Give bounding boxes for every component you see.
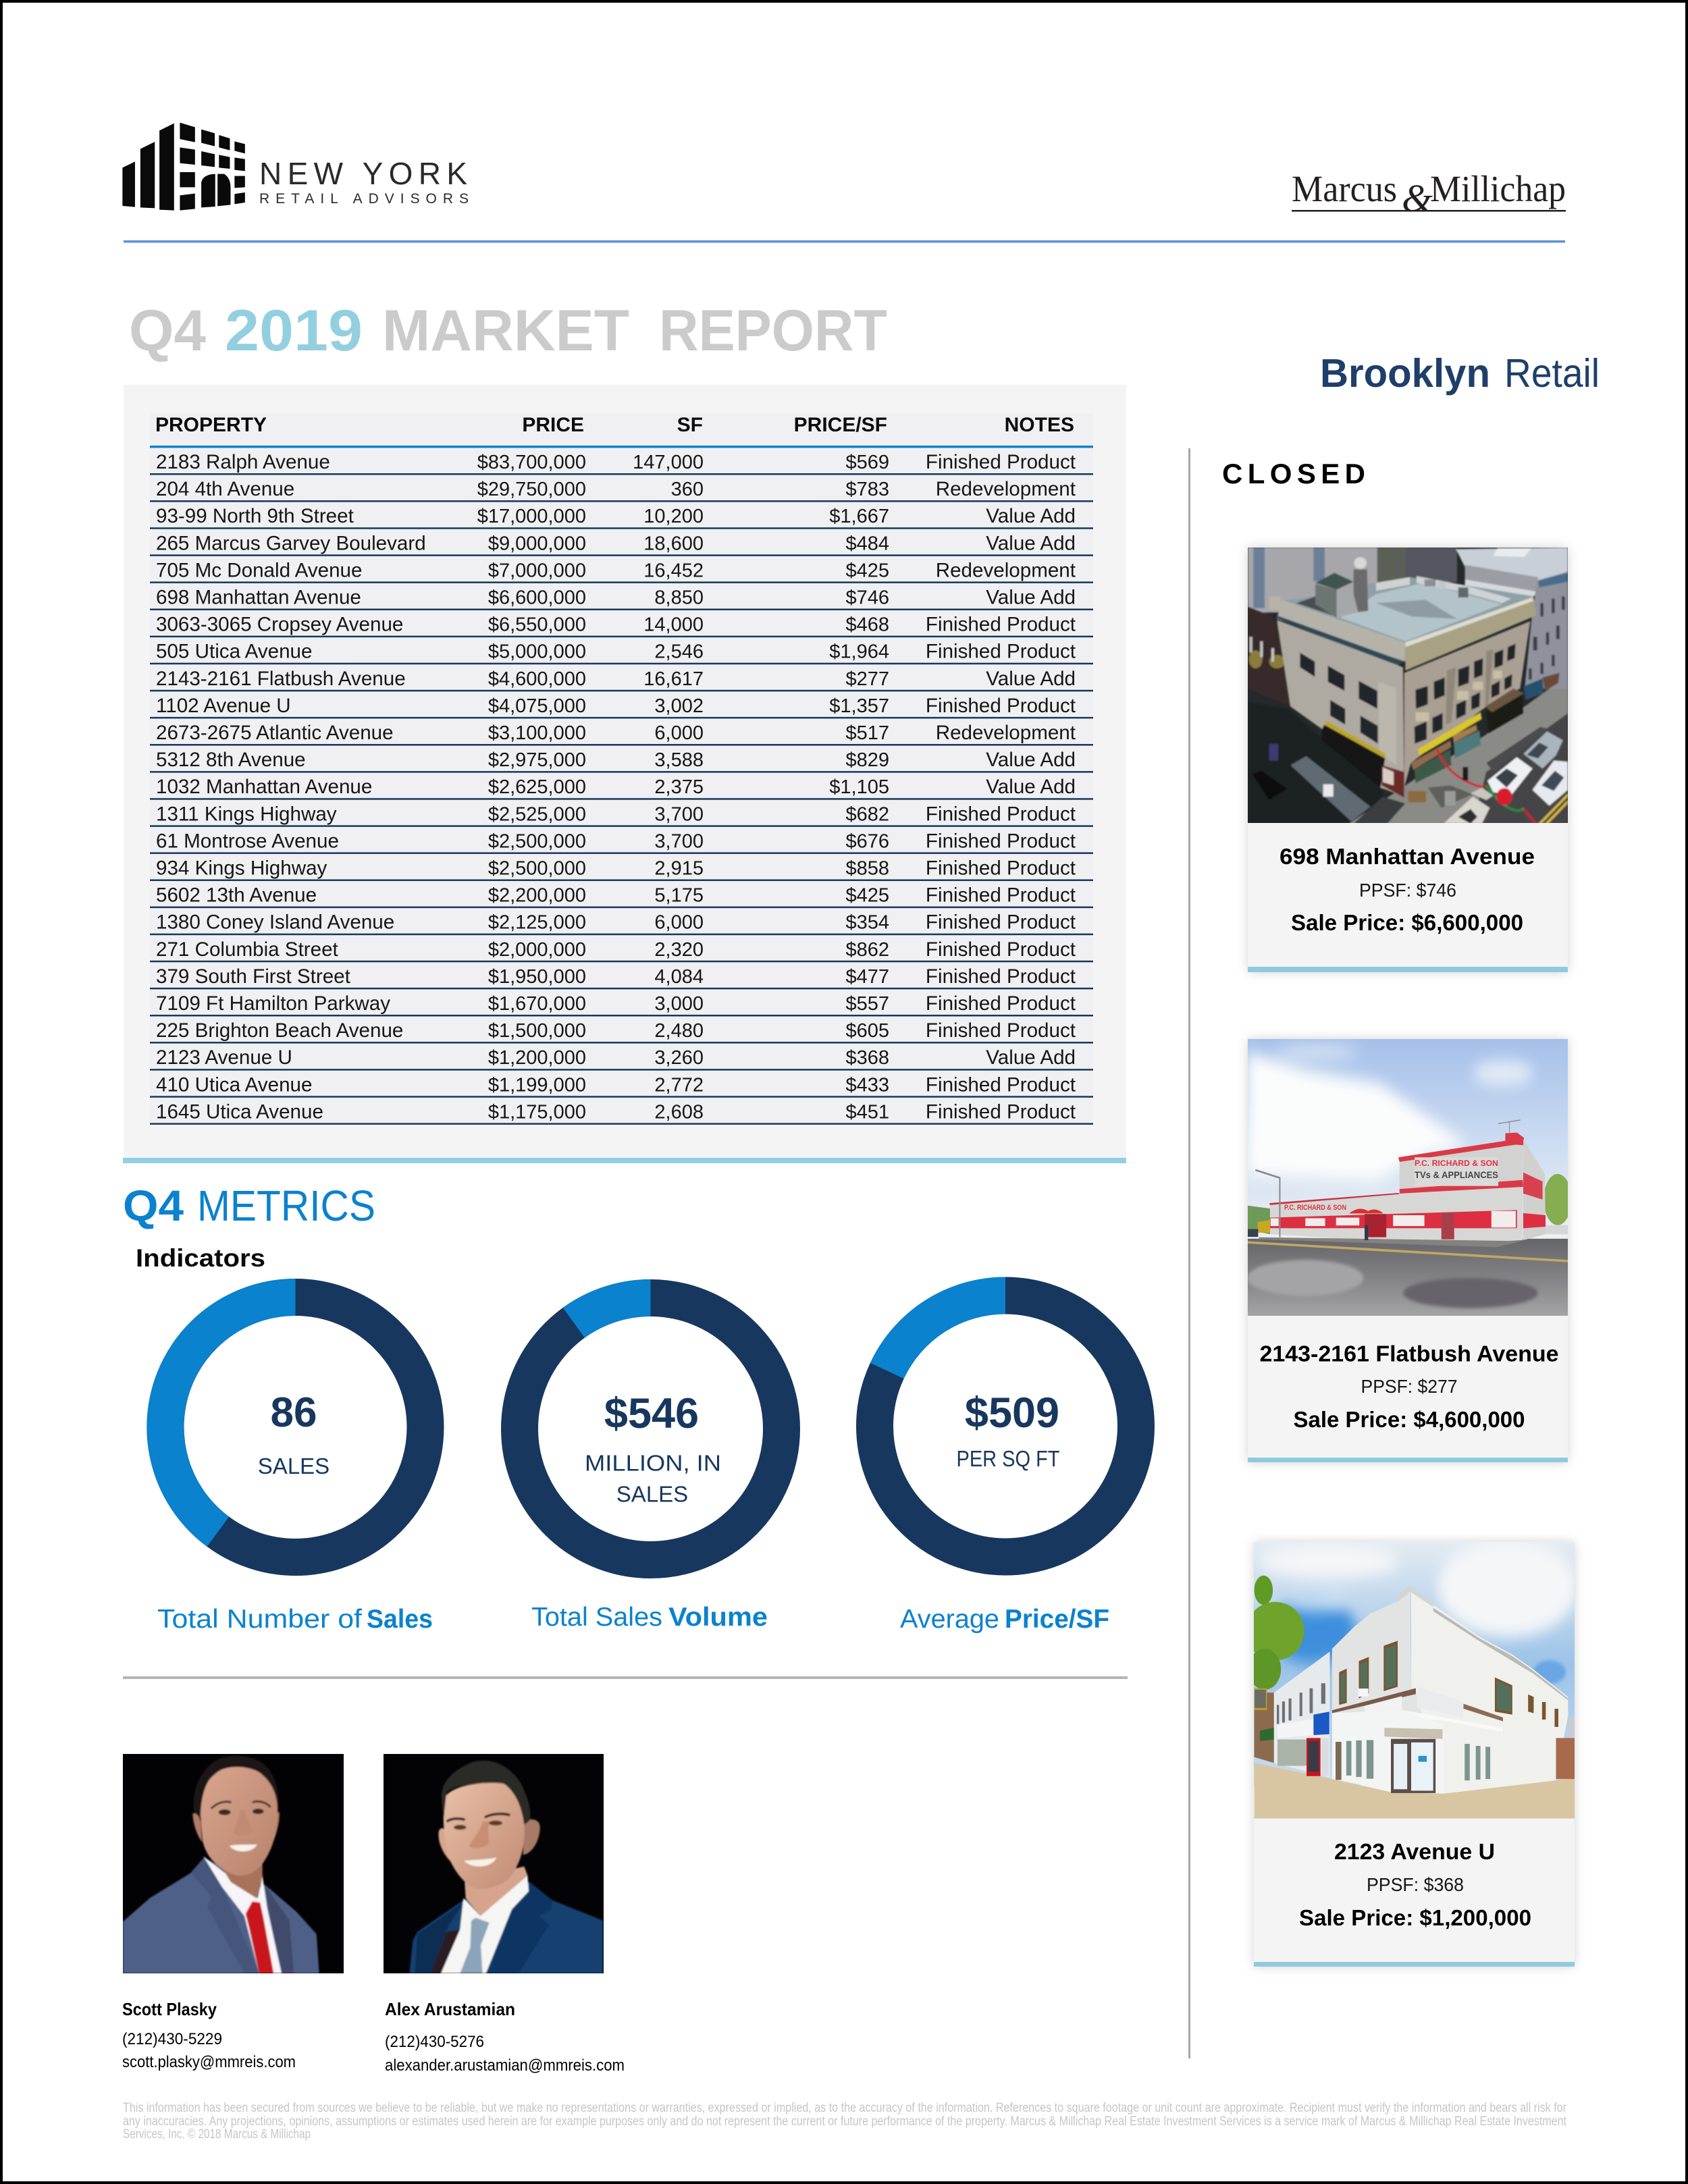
text: card details	[1260, 1341, 1558, 1432]
table rows: 1032 Manhattan Avenue	[156, 776, 372, 798]
table header: PRICE/SF	[794, 414, 887, 436]
heading: Q4 Metrics	[123, 1181, 375, 1230]
contact: Scott Plasky: (212)430-5229	[122, 2030, 222, 2048]
table rows: Finished Product	[926, 641, 1076, 663]
table rows: 3,000	[654, 993, 704, 1015]
contact: Alex Arustamian	[385, 1999, 625, 2075]
donut chart: total number of sales	[147, 1279, 425, 1557]
table rows: $83,700,000	[477, 452, 586, 473]
logo: Marcus & Millichap	[1292, 168, 1566, 220]
table rows: $1,950,000	[488, 966, 586, 988]
table rows: $4,600,000	[488, 668, 586, 690]
table rows: 147,000	[633, 452, 704, 473]
table rows: 3063-3065 Cropsey Avenue	[156, 614, 403, 636]
table rows: $17,000,000	[477, 506, 586, 527]
table rows: $29,750,000	[477, 479, 586, 500]
table rows: Finished Product	[926, 1100, 1076, 1123]
table rows: $2,625,000	[488, 776, 586, 798]
title: REPORT	[659, 298, 887, 363]
table rows: $2,000,000	[488, 939, 586, 961]
table rows: Redevelopment	[936, 722, 1076, 744]
table rows: 3,700	[654, 803, 704, 825]
table rows: $829	[845, 749, 889, 771]
table rows: $425	[845, 885, 889, 907]
table rows: $1,500,000	[488, 1020, 586, 1042]
table rows: Value Add	[986, 668, 1076, 690]
table rows: 225 Brighton Beach Avenue	[156, 1019, 403, 1042]
table rows: 2123 Avenue U	[156, 1046, 292, 1069]
heading: Q4 Metrics: METRICS	[197, 1181, 375, 1230]
table rows: 2,480	[654, 1020, 704, 1042]
table rows: 271 Columbia Street	[156, 938, 338, 961]
table rows: $9,000,000	[488, 533, 586, 554]
disclaimer: Services, Inc. © 2018 Marcus & Millichap	[123, 2127, 311, 2141]
table rows: Finished Product	[926, 857, 1076, 879]
table rows: Value Add	[986, 776, 1076, 798]
table header: PROPERTY	[155, 414, 267, 436]
table rows: Finished Product	[926, 965, 1076, 988]
heading: Closed: CLOSED	[1222, 458, 1365, 489]
table rows: $569	[845, 452, 889, 473]
table rows: $2,500,000	[488, 857, 586, 879]
donut chart: average price per SF: PER SQ FT	[956, 1446, 1060, 1471]
table rows: 14,000	[643, 614, 704, 636]
table rows: Finished Product	[926, 1073, 1076, 1096]
title: Q4	[129, 298, 206, 363]
table rows: 16,452	[643, 560, 704, 581]
photo: 2123 Avenue U building	[1246, 1537, 1577, 1819]
table rows: $4,075,000	[488, 695, 586, 717]
table rows: 2,772	[654, 1074, 704, 1096]
table rows: $7,000,000	[488, 560, 586, 581]
text: logo wordmark	[259, 156, 469, 207]
text: card details: Sale Price: $4,600,000	[1294, 1407, 1525, 1432]
table rows: 934 Kings Highway	[156, 857, 327, 879]
caption: total number of sales	[157, 1605, 433, 1634]
text: card details	[1299, 1839, 1531, 1930]
table rows	[150, 451, 1093, 1125]
table rows: $605	[845, 1020, 889, 1042]
heading: Brooklyn Retail: Brooklyn	[1320, 351, 1490, 396]
table rows: 2143-2161 Flatbush Avenue	[156, 668, 406, 690]
table rows: Finished Product	[926, 614, 1076, 636]
donut chart: total sales volume: $546	[604, 1390, 699, 1437]
caption: total number of sales: Total Number of	[157, 1605, 362, 1634]
disclaimer	[123, 2101, 1567, 2141]
table rows: $1,670,000	[488, 993, 586, 1015]
table rows: $746	[845, 587, 889, 609]
table rows: $682	[845, 803, 889, 825]
table rows: $477	[845, 966, 889, 988]
table rows: 2,915	[654, 857, 704, 879]
table rows: Value Add	[986, 1046, 1076, 1069]
card: 698 Manhattan Avenue	[1248, 548, 1568, 972]
table rows: $862	[845, 939, 889, 961]
table rows: 8,850	[654, 587, 704, 609]
table rows: $1,200,000	[488, 1047, 586, 1069]
table rows: $5,000,000	[488, 641, 586, 663]
table rows: 2183 Ralph Avenue	[156, 451, 330, 473]
text: logo wordmark: NEW YORK	[259, 156, 467, 191]
text: card details	[1280, 844, 1535, 935]
table rows: 18,600	[643, 533, 704, 554]
table rows: $2,525,000	[488, 803, 586, 825]
table rows: 6,000	[654, 722, 704, 744]
photo: Scott Plasky portrait	[123, 1754, 344, 1973]
table rows: Value Add	[986, 586, 1076, 609]
title: 2019	[225, 298, 363, 363]
table rows: Redevelopment	[936, 478, 1076, 500]
table rows: 5312 8th Avenue	[156, 749, 306, 771]
table rows: 2,546	[654, 641, 704, 663]
table rows: $6,600,000	[488, 587, 586, 609]
table rows: $1,105	[829, 776, 889, 798]
table rows: $2,975,000	[488, 749, 586, 771]
contact: Scott Plasky: Scott Plasky	[122, 1999, 217, 2019]
table rows: 2,608	[654, 1101, 704, 1123]
table rows: 61 Montrose Avenue	[156, 830, 339, 852]
table rows: $858	[845, 857, 889, 879]
table rows: $2,500,000	[488, 830, 586, 852]
table rows: 1380 Coney Island Avenue	[156, 911, 394, 934]
table rows: $1,357	[829, 695, 889, 717]
contact: Alex Arustamian: (212)430-5276	[385, 2033, 484, 2051]
caption: total sales volume: Volume	[668, 1603, 768, 1632]
photo: 2143-2161 Flatbush Avenue building: P.C. RICHARD & SON	[1284, 1204, 1346, 1212]
table rows: 705 Mc Donald Avenue	[156, 559, 362, 581]
text: card details: PPSF: $277	[1361, 1376, 1457, 1397]
table rows: 505 Utica Avenue	[156, 641, 312, 663]
caption: total sales volume: Total Sales	[531, 1603, 662, 1632]
text: card details: PPSF: $746	[1359, 880, 1456, 901]
logo: Marcus & Millichap: Millichap	[1430, 168, 1566, 209]
heading: Brooklyn Retail: Retail	[1504, 351, 1600, 396]
table rows: 1102 Avenue U	[156, 695, 291, 717]
table rows: 1645 Utica Avenue	[156, 1100, 323, 1123]
table rows: Finished Product	[926, 803, 1076, 825]
heading: Q4 Metrics: Q4	[123, 1181, 184, 1230]
table rows: 2,320	[654, 939, 704, 961]
table rows: $451	[845, 1101, 889, 1123]
donut chart: total sales volume: SALES	[616, 1481, 688, 1507]
table rows: $3,100,000	[488, 722, 586, 744]
table rows: 16,617	[643, 668, 704, 690]
logo: New York Retail Advisors	[122, 123, 469, 211]
table rows: $354	[845, 912, 889, 934]
text: card details: 2143-2161 Flatbush Avenue	[1260, 1341, 1558, 1366]
table header: PRICE	[522, 414, 584, 436]
table rows: $2,125,000	[488, 912, 586, 934]
donut chart: total sales volume	[520, 1279, 782, 1560]
table header: SF	[677, 414, 703, 436]
donut chart: total number of sales: 86	[271, 1389, 317, 1436]
text: card details: 698 Manhattan Avenue	[1280, 844, 1535, 869]
table rows: $517	[845, 722, 889, 744]
photo: 698 Manhattan Avenue building	[1248, 548, 1568, 824]
heading: Indicators: Indicators	[136, 1244, 265, 1272]
table rows: 93-99 North 9th Street	[156, 505, 354, 527]
table header	[150, 414, 1093, 448]
contact: Alex Arustamian: alexander.arustamian@mmreis.com	[385, 2056, 625, 2075]
table rows: 6,000	[654, 912, 704, 934]
contact: Alex Arustamian: Alex Arustamian	[385, 1999, 515, 2019]
table rows: Finished Product	[926, 911, 1076, 934]
photo: 2143-2161 Flatbush Avenue building	[1247, 1039, 1572, 1316]
table rows: $1,667	[829, 506, 889, 527]
heading: Brooklyn Retail	[1320, 351, 1600, 396]
donut chart: total sales volume: MILLION, IN	[585, 1450, 721, 1476]
table rows: $6,550,000	[488, 614, 586, 636]
table rows: $433	[845, 1074, 889, 1096]
table rows: $783	[845, 479, 889, 500]
table rows: 3,260	[654, 1047, 704, 1069]
table rows: Redevelopment	[936, 559, 1076, 581]
table rows: 410 Utica Avenue	[156, 1073, 312, 1096]
donut chart: average price per SF	[870, 1277, 1136, 1557]
donut chart: average price per SF: $509	[965, 1389, 1059, 1437]
table rows: Finished Product	[926, 830, 1076, 852]
table rows: $277	[845, 668, 889, 690]
table rows: Finished Product	[926, 884, 1076, 907]
contact: Scott Plasky	[122, 1999, 296, 2071]
table rows: 2673-2675 Atlantic Avenue	[156, 722, 394, 744]
text: card details: Sale Price: $1,200,000	[1299, 1905, 1531, 1930]
table rows: 204 4th Avenue	[156, 478, 294, 500]
table rows: $676	[845, 830, 889, 852]
table rows: 265 Marcus Garvey Boulevard	[156, 532, 426, 554]
table rows: Finished Product	[926, 992, 1076, 1015]
table rows: Finished Product	[926, 451, 1076, 473]
card: 2123 Avenue U	[1246, 1537, 1577, 1967]
caption: average price per SF: Price/SF	[1005, 1605, 1109, 1634]
donut chart: total number of sales: SALES	[258, 1454, 329, 1479]
table rows: Finished Product	[926, 1019, 1076, 1042]
table rows: 3,002	[654, 695, 704, 717]
caption: total sales volume	[531, 1603, 768, 1632]
table rows: $2,200,000	[488, 885, 586, 907]
table rows: Finished Product	[926, 695, 1076, 717]
table rows: 5,175	[654, 885, 704, 907]
table rows: 379 South First Street	[156, 965, 350, 988]
table rows: 3,588	[654, 749, 704, 771]
table rows: $1,175,000	[488, 1101, 586, 1123]
caption: average price per SF: Average	[900, 1605, 999, 1634]
logo: Marcus & Millichap: &	[1402, 176, 1433, 220]
table rows: $1,199,000	[488, 1074, 586, 1096]
caption: average price per SF	[900, 1605, 1109, 1634]
text: card details: Sale Price: $6,600,000	[1291, 910, 1523, 935]
caption: total number of sales: Sales	[367, 1605, 433, 1634]
table rows: Value Add	[986, 505, 1076, 527]
logo: Marcus & Millichap: Marcus	[1292, 168, 1397, 209]
contact: Scott Plasky: scott.plasky@mmreis.com	[122, 2053, 296, 2071]
icon: building	[122, 123, 245, 211]
table header: NOTES	[1005, 414, 1074, 436]
card: 2143-2161 Flatbush Avenue	[1247, 1039, 1572, 1462]
table rows: Value Add	[986, 532, 1076, 554]
table rows: 1311 Kings Highway	[156, 803, 337, 825]
text: card details: 2123 Avenue U	[1334, 1839, 1495, 1864]
table rows: $484	[845, 533, 889, 554]
table rows: 7109 Ft Hamilton Parkway	[156, 992, 390, 1015]
photo: Alex Arustamian portrait	[384, 1754, 604, 1973]
photo: 2143-2161 Flatbush Avenue building: P.C. RICHARD & SON	[1415, 1158, 1498, 1168]
table rows: 698 Manhattan Avenue	[156, 586, 361, 609]
text: logo wordmark: RETAIL ADVISORS	[259, 191, 469, 207]
table rows: Value Add	[986, 749, 1076, 771]
table rows: $1,964	[829, 641, 889, 663]
text: card details: PPSF: $368	[1367, 1874, 1464, 1895]
table rows: 5602 13th Avenue	[156, 884, 317, 907]
panel: sales table	[123, 385, 1126, 1163]
table rows: $557	[845, 993, 889, 1015]
table rows: 3,700	[654, 830, 704, 852]
table rows: 10,200	[643, 506, 704, 527]
table rows: 2,375	[654, 776, 704, 798]
table rows: Finished Product	[926, 938, 1076, 961]
table rows: 4,084	[654, 966, 704, 988]
table rows: $368	[845, 1047, 889, 1069]
title: MARKET	[382, 298, 629, 363]
title	[129, 298, 887, 363]
table rows: 360	[671, 479, 704, 500]
table rows: $425	[845, 560, 889, 581]
photo: 2143-2161 Flatbush Avenue building: TVs & APPLIANCES	[1415, 1169, 1498, 1180]
table rows: $468	[845, 614, 889, 636]
